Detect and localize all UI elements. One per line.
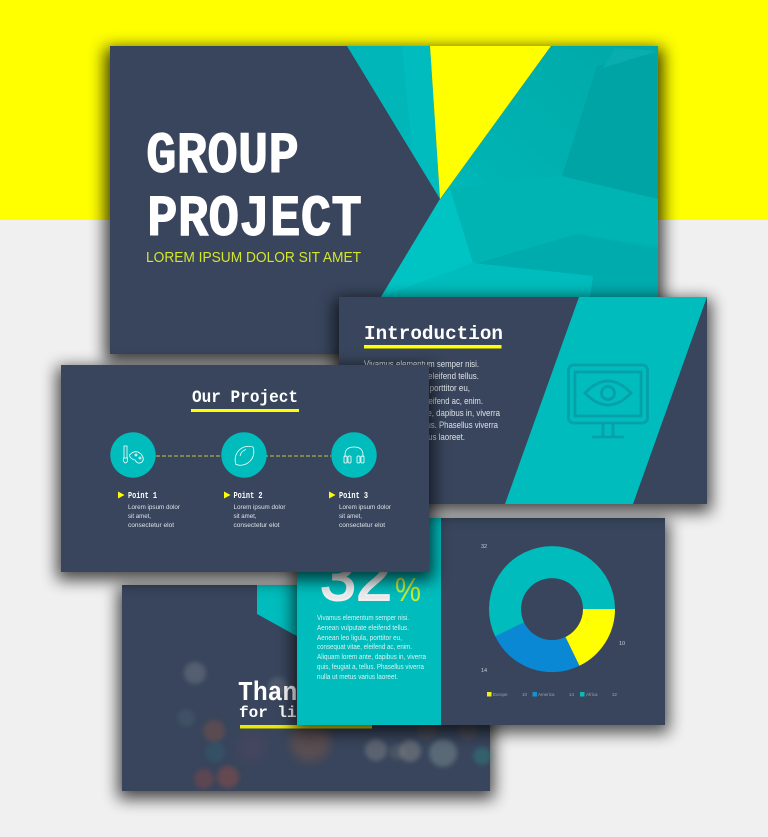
stat body text [317, 615, 426, 681]
point 2: sit amet, [234, 513, 257, 520]
chart legend: 10 [522, 692, 528, 697]
stat body text: Vivamus elementum semper nisi. [317, 615, 409, 622]
introduction heading: Introduction [364, 323, 503, 345]
chart legend: 32 [612, 692, 618, 697]
yellow underline [364, 345, 502, 348]
thanks heading: Thanks [238, 679, 327, 709]
icon: brush and palette [110, 432, 156, 478]
point 2: consectetur elot [234, 522, 280, 529]
stat 32 percent: % [395, 571, 421, 608]
teal corner shape [257, 585, 340, 660]
stat body text: Aenean leo ligula, porttitor eu, [317, 635, 402, 642]
point 2: Lorem ipsum dolor [234, 504, 286, 511]
point 1: Lorem ipsum dolor [128, 504, 181, 511]
point 1: Point 1 [128, 491, 157, 501]
chart legend: America [538, 692, 555, 697]
donut chart [489, 546, 615, 672]
teal facets right [381, 46, 658, 297]
chart legend [487, 692, 618, 697]
teal band [505, 297, 707, 504]
cover title: PROJECT [147, 188, 362, 253]
dashed connector [156, 455, 331, 457]
introduction body text: Vivamus elementum semper nisi. [364, 359, 479, 369]
slide: thanks [118, 585, 494, 799]
teal stat panel [297, 518, 441, 725]
point 1: consectetur elot [128, 522, 174, 529]
introduction body text [364, 359, 500, 442]
subheading: for listening [239, 704, 364, 722]
chart value labels [481, 544, 625, 674]
stat body text: nulla ut metus varius laoreet. [317, 674, 398, 681]
point 1 [118, 491, 181, 529]
our project heading: Our Project [192, 388, 298, 408]
chart value labels: 14 [481, 668, 487, 674]
point 3: sit amet, [339, 513, 362, 520]
teal triangle left [347, 46, 440, 199]
yellow triangle [430, 46, 551, 199]
introduction body text: quis, feugiat a, tellus. Phasellus viverra [364, 420, 498, 430]
introduction body text: Aenean vulputate eleifend tellus. [364, 371, 479, 381]
slide: introduction [335, 297, 711, 512]
point 3: Point 3 [339, 491, 368, 501]
chart value labels: 32 [481, 544, 487, 550]
introduction body text: Aliquam lorem ante, dapibus in, viverra [364, 408, 500, 418]
yellow underline [191, 409, 299, 412]
introduction body text: Aenean leo ligula, porttitor eu, [364, 383, 470, 393]
point 2: Point 2 [234, 491, 262, 501]
stat body text: Aliquam lorem ante, dapibus in, viverra [317, 654, 426, 661]
stat body text: Aenean vulputate eleifend tellus. [317, 625, 409, 632]
chart legend: Europe [493, 692, 508, 697]
stat body text: consequat vitae, eleifend ac, enim. [317, 644, 412, 651]
slide: group project cover [105, 46, 663, 363]
point 3: consectetur elot [339, 522, 385, 529]
stat body text: quis, feugiat a, tellus. Phasellus viverra [317, 664, 424, 671]
bokeh lights [177, 662, 491, 789]
stat 32 percent: 32 [320, 540, 392, 614]
icon: football [221, 432, 267, 478]
icon: headphones [331, 432, 377, 478]
chart legend: Africa [586, 692, 598, 697]
chart value labels: 10 [619, 641, 625, 647]
chart legend: 14 [569, 692, 575, 697]
point 3: Lorem ipsum dolor [339, 504, 392, 511]
cover title [146, 125, 362, 253]
point 1: sit amet, [128, 513, 151, 520]
slide: chart [293, 518, 669, 733]
icon: monitor with eye [568, 365, 648, 437]
yellow underline [240, 725, 372, 728]
slide: our project [57, 365, 433, 580]
point 2 [224, 491, 286, 529]
introduction body text: consequat vitae, eleifend ac, enim. [364, 396, 483, 406]
introduction body text: nulla ut metus varius laoreet. [364, 432, 465, 442]
cover subtitle: LOREM IPSUM DOLOR SIT AMET [146, 249, 361, 266]
point 3 [329, 491, 392, 529]
cover title: GROUP [146, 125, 299, 190]
